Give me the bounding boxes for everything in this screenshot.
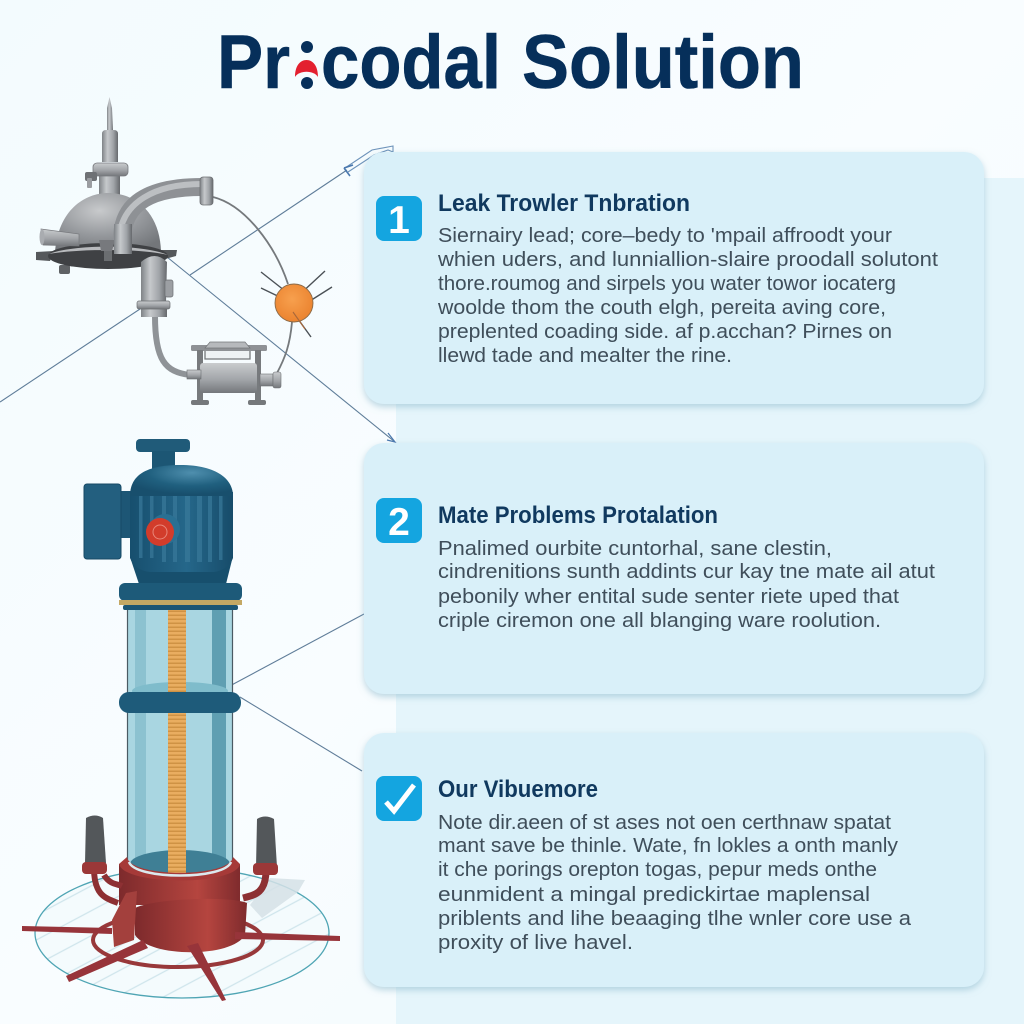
body 1: llewd tade and mealter the rine. bbox=[438, 344, 732, 367]
red button bbox=[146, 514, 180, 546]
dome bbox=[55, 193, 161, 252]
backing panel bbox=[396, 178, 1024, 1024]
callout lines bbox=[0, 146, 395, 771]
neck flange bbox=[93, 163, 128, 176]
neck bbox=[99, 172, 120, 198]
body 1: woolde thom the couth elgh, pereita aving core, bbox=[437, 296, 886, 319]
plate bbox=[48, 243, 168, 269]
red base upper bbox=[119, 864, 240, 905]
pipe base bbox=[114, 224, 132, 254]
left post bbox=[85, 816, 106, 863]
glass base rim bbox=[129, 862, 231, 876]
panel 1 bbox=[364, 152, 984, 404]
red collar rim bbox=[119, 857, 240, 880]
body 1: Siernairy lead; core–bedy to 'mpail affroodt your bbox=[438, 224, 892, 247]
badge 2: 2 bbox=[388, 501, 410, 544]
mid ring bbox=[119, 692, 241, 713]
orange ball bbox=[261, 271, 332, 337]
curved pipe bbox=[122, 187, 202, 240]
spike bbox=[107, 97, 113, 130]
panel 2 bbox=[364, 443, 984, 694]
body 3: it che porings orepton togas, pepur meds onthe bbox=[438, 858, 877, 881]
body 2: criple ciremon one all blanging ware roolution. bbox=[438, 609, 881, 632]
illustration: valve assembly bbox=[36, 97, 332, 405]
title bbox=[217, 20, 804, 105]
badge check bbox=[376, 776, 422, 821]
motor dome bbox=[130, 465, 233, 496]
body 1: whien uders, and lunniallion-slaire proodall solutont bbox=[437, 248, 938, 271]
right post arm bbox=[243, 870, 266, 898]
body 1: preplented coading side. af p.acchan? Pirnes on bbox=[438, 320, 892, 343]
bracket bbox=[112, 891, 137, 947]
card 3 background bbox=[364, 733, 984, 987]
body 3: proxity of live havel. bbox=[438, 931, 633, 954]
terminal box bbox=[84, 484, 121, 559]
glass cylinder bbox=[127, 608, 233, 878]
red base lower bbox=[135, 899, 247, 952]
threaded rod bbox=[168, 610, 186, 873]
body 3: priblents and lihe beaaging tlhe wnler core use a bbox=[438, 907, 912, 930]
side nipple bbox=[85, 172, 97, 181]
plate bolts bbox=[99, 240, 115, 251]
badge 1 bbox=[376, 196, 422, 242]
motor body bbox=[130, 492, 233, 572]
body 1 bbox=[437, 224, 938, 367]
cylinder side box bbox=[165, 280, 173, 297]
heading 3: Our Vibuemore bbox=[438, 776, 598, 803]
heading 1: Leak Trowler Tnbration bbox=[438, 190, 690, 217]
body 2: cindrenitions sunth addints cur kay tne mate ail atut bbox=[438, 560, 935, 583]
base disc bbox=[35, 868, 329, 998]
card 2 background bbox=[364, 443, 984, 694]
cylinder bbox=[141, 256, 167, 303]
body 2 bbox=[438, 537, 935, 632]
wire bbox=[213, 197, 292, 373]
left stub bbox=[41, 229, 79, 246]
pump bbox=[187, 342, 281, 405]
spikes bbox=[22, 926, 340, 1001]
body 1: thore.roumog and sirpels you water towor iocaterg bbox=[438, 272, 896, 295]
body 3: Note dir.aeen of st ases not oen certhnaw spatat bbox=[438, 811, 891, 834]
motor stem bbox=[152, 451, 175, 471]
base flange bbox=[119, 583, 242, 610]
pipe down to pump bbox=[155, 316, 190, 375]
right cup bbox=[253, 863, 278, 875]
badge 2 bbox=[376, 498, 422, 544]
badge 1: 1 bbox=[388, 199, 410, 242]
motor top flange bbox=[136, 439, 190, 452]
motor lower band bbox=[131, 560, 232, 584]
body 3: eunmident a mingal predickirtae maplensal bbox=[438, 883, 870, 906]
illustration: water tower pump bbox=[22, 439, 340, 1001]
heading 2: Mate Problems Protalation bbox=[438, 502, 718, 529]
body 3: mant save be thinle. Wate, fn lokles a onth manly bbox=[438, 834, 899, 857]
cylinder flange bbox=[137, 301, 170, 309]
right post bbox=[256, 816, 277, 867]
body 3 bbox=[438, 811, 912, 954]
card 1 background bbox=[364, 152, 984, 404]
left cup bbox=[82, 862, 107, 874]
title: Solution bbox=[522, 20, 804, 105]
panel 3 bbox=[364, 733, 984, 987]
terminal connector bbox=[114, 491, 134, 538]
plate tabs bbox=[36, 250, 177, 261]
motor fins bbox=[139, 496, 222, 562]
ring bbox=[93, 913, 263, 967]
pipe flange bbox=[200, 177, 213, 205]
body 2: Pnalimed ourbite cuntorhal, sane clestin, bbox=[438, 537, 832, 560]
title: Pr bbox=[217, 20, 290, 105]
title: codal bbox=[321, 20, 501, 105]
body 2: pebonily wher entital sude senter riete uped that bbox=[438, 585, 899, 608]
bottom nut bbox=[59, 265, 70, 274]
left post arm bbox=[94, 868, 122, 903]
collar bbox=[102, 130, 118, 162]
